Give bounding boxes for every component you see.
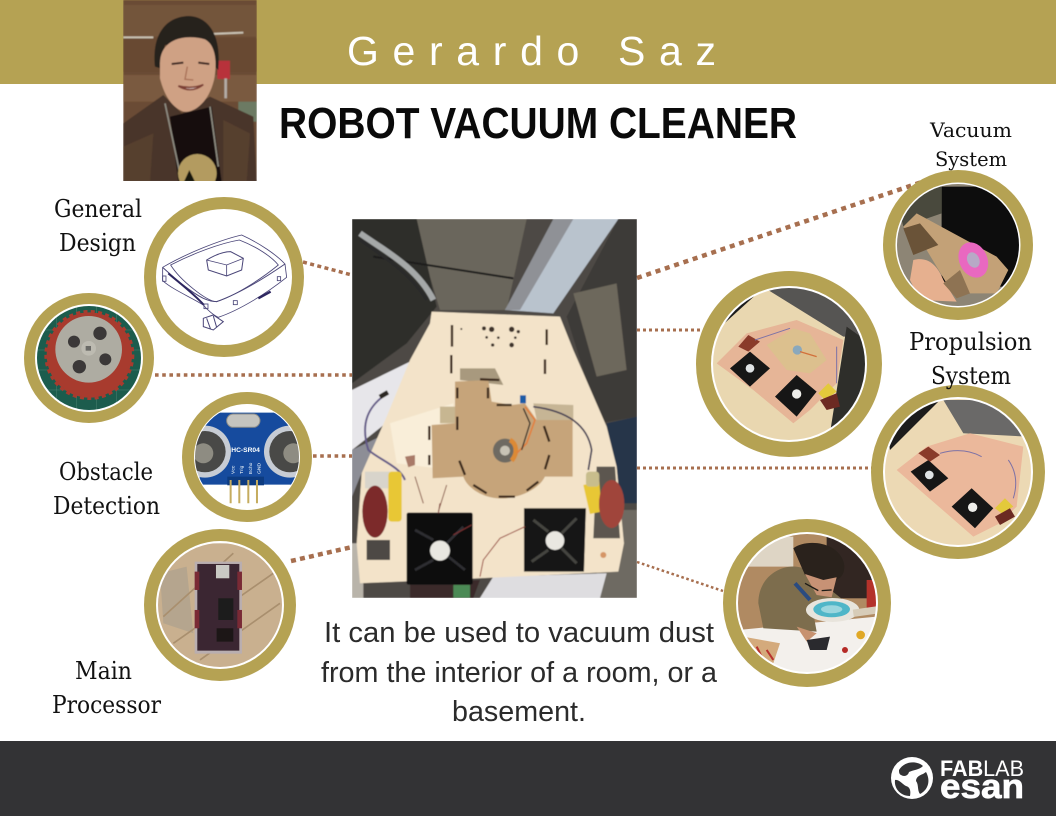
label: main processor (52, 657, 161, 719)
connector lines (155, 182, 922, 591)
label: main processor: Main (75, 657, 132, 685)
description text (321, 617, 718, 728)
circle: builder soldering photo (723, 519, 891, 687)
name heading: Gerardo Saz (347, 28, 716, 74)
title: ROBOT VACUUM CLEANER (279, 99, 797, 148)
description text: basement. (452, 696, 586, 728)
central robot photo (352, 219, 637, 598)
label: vacuum system: System (935, 147, 1007, 171)
label: vacuum system (929, 118, 1012, 171)
connector: general design (303, 262, 352, 275)
connector: main processor (291, 547, 352, 561)
label: general design (54, 195, 142, 257)
label: main processor: Processor (52, 691, 161, 719)
footer band (0, 741, 1056, 816)
connector: wheel (155, 373, 352, 377)
portrait photo (123, 0, 257, 193)
circle: ultrasonic sensor: Vcc (230, 465, 236, 474)
logo text: fablab: FABLAB (940, 756, 1024, 781)
description text: from the interior of a room, or a (321, 657, 718, 689)
circle: propulsion photo without cover (871, 385, 1045, 559)
label: propulsion system: Propulsion (909, 328, 1032, 356)
label: propulsion system: System (931, 362, 1011, 390)
label: propulsion system (909, 328, 1032, 390)
icon: fablab emblem (891, 757, 933, 799)
circle: propulsion photo with cover (696, 271, 882, 457)
logo text: esan: esan (940, 768, 1024, 806)
header band (0, 0, 1056, 84)
connector: obstacle detection (313, 454, 352, 458)
circle: ultrasonic sensor: Trig (239, 465, 245, 474)
circle: wheel photo (24, 293, 154, 423)
circle: ultrasonic sensor: HC-SR04 (231, 447, 260, 454)
connector: builder photo (637, 562, 723, 591)
circle: main processor board (144, 529, 296, 681)
label: obstacle detection: Detection (53, 492, 160, 520)
label: vacuum system: Vacuum (929, 118, 1012, 142)
circle: ultrasonic sensor (179, 392, 316, 522)
circle: ultrasonic sensor: Echo (248, 462, 254, 474)
connector: propulsion top (637, 328, 706, 332)
label: general design: General (54, 195, 142, 223)
connector: vacuum system (637, 182, 922, 278)
circle: vacuum system photo (883, 170, 1033, 320)
description text: It can be used to vacuum dust (324, 617, 714, 649)
label: obstacle detection (53, 458, 160, 520)
circle: general design sketch (144, 197, 304, 357)
circle: ultrasonic sensor: GND (257, 462, 263, 474)
connector: propulsion bottom (637, 466, 872, 470)
label: general design: Design (59, 229, 136, 257)
logo: fablab esan (891, 756, 1024, 806)
label: obstacle detection: Obstacle (59, 458, 153, 486)
